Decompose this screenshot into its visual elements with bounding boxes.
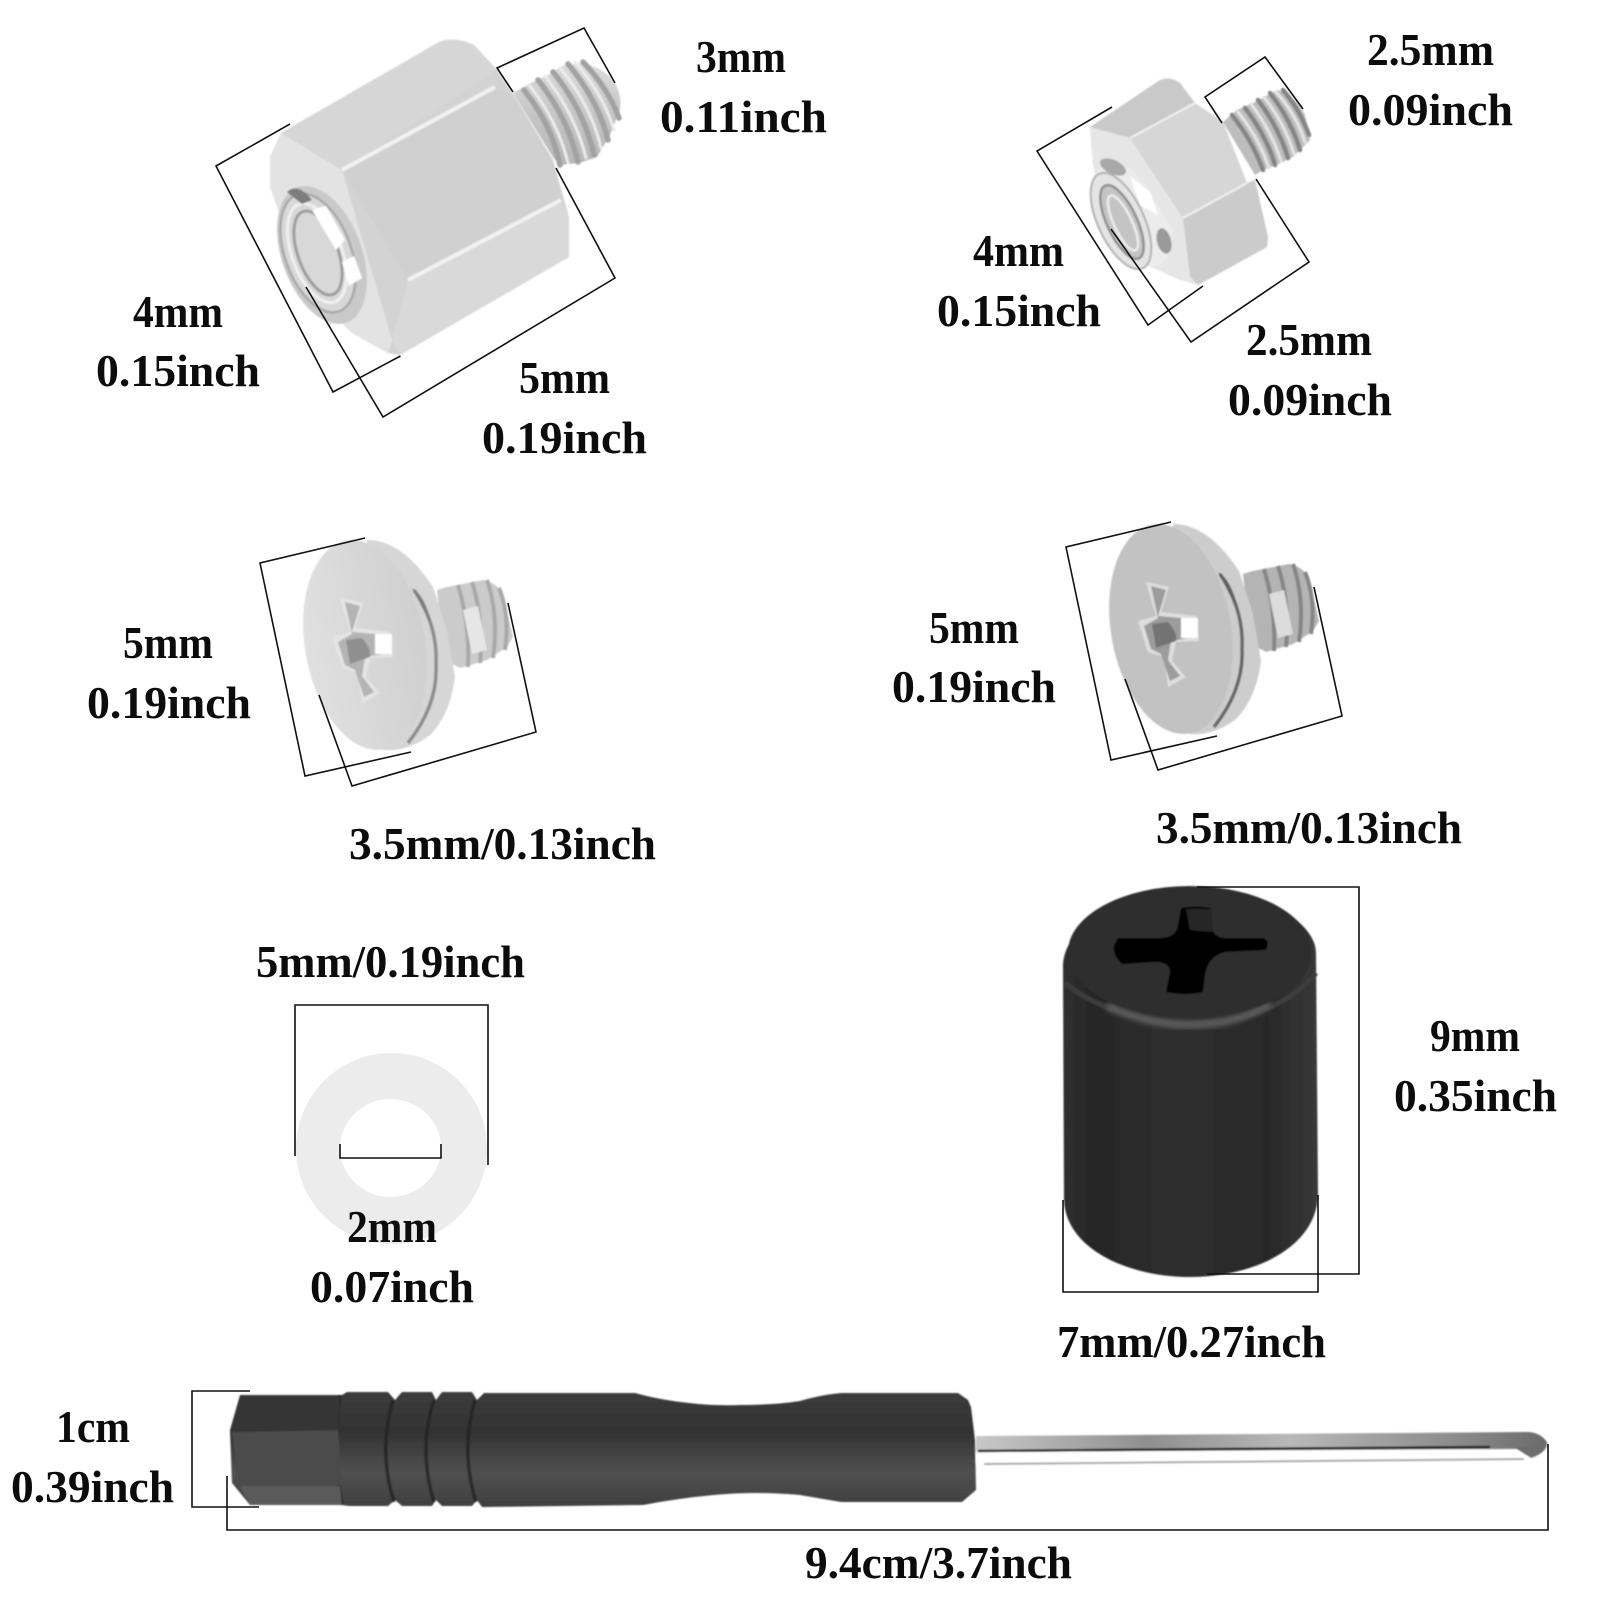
label: 5mm 0.19inch: 5mm (123, 618, 213, 668)
label: 5mm 0.19inch: 5mm (929, 603, 1019, 653)
label: 5mm 0.19inch (892, 603, 1056, 712)
bracket: 5mm outer (295, 1005, 488, 1165)
bracket: 4mm width (216, 124, 400, 392)
bracket: 5mm head (1066, 522, 1217, 760)
panel: screwdriver (11, 1391, 1548, 1588)
label: 9mm 0.35inch: 9mm (1430, 1011, 1520, 1061)
label: 9.4cm/3.7inch: 9.4cm/3.7inch (805, 1538, 1072, 1588)
label: 2.5mm 0.09inch bottom: 0.09inch (1228, 375, 1392, 425)
label: 5mm 0.19inch (482, 353, 647, 463)
label: 3mm 0.11inch: 3mm (696, 32, 786, 82)
label: 2mm 0.07inch: 2mm (347, 1202, 437, 1252)
label: 5mm 0.19inch: 0.19inch (87, 678, 251, 728)
bracket: 2.5mm thread (1205, 57, 1303, 123)
label: 2.5mm 0.09inch top: 0.09inch (1348, 85, 1513, 135)
label: 1cm 0.39inch (11, 1402, 174, 1512)
label: 2.5mm 0.09inch top (1348, 25, 1513, 135)
panel: washer (256, 937, 525, 1312)
panel: silver hex standoff, small (937, 25, 1513, 425)
label: 1cm 0.39inch: 1cm (56, 1402, 130, 1452)
label: 9mm 0.35inch: 0.35inch (1394, 1071, 1557, 1121)
label: 5mm 0.19inch (87, 618, 251, 728)
label: 2.5mm 0.09inch top: 2.5mm (1367, 25, 1494, 75)
label: 4mm 0.15inch (937, 226, 1101, 336)
panel: flat head screw, left (87, 530, 656, 869)
bracket: 9mm height (1197, 887, 1359, 1274)
label: 4mm 0.15inch: 0.15inch (96, 346, 260, 396)
label: 2mm 0.07inch (310, 1202, 474, 1312)
icon: black cylinder (1063, 886, 1318, 1277)
label: 9mm 0.35inch (1394, 1011, 1557, 1121)
icon: flat head screw (1094, 514, 1319, 744)
label: 4mm 0.15inch: 4mm (973, 226, 1064, 276)
bracket: 5mm head (260, 538, 411, 776)
label: 2.5mm 0.09inch bottom (1228, 315, 1392, 425)
panel: silver hex standoff, large (96, 28, 827, 463)
icon: hex standoff large (260, 40, 620, 355)
bracket: 2mm inner (340, 1144, 441, 1158)
label: 7mm/0.27inch: 7mm/0.27inch (1057, 1317, 1326, 1367)
bracket: 3mm thread (497, 28, 615, 92)
bracket: 5mm length (306, 168, 615, 417)
bracket: 3.5mm length (1125, 587, 1342, 770)
label: 5mm 0.19inch: 0.19inch (482, 413, 647, 463)
panel: black cylinder cap (1057, 886, 1557, 1367)
label: 3mm 0.11inch (660, 32, 827, 142)
bracket: 4mm width (1037, 107, 1203, 325)
bracket: 1cm diameter (192, 1391, 259, 1507)
label: 4mm 0.15inch (96, 287, 260, 396)
label: 4mm 0.15inch: 4mm (133, 287, 223, 337)
icon: flat head screw (288, 530, 513, 760)
label: 1cm 0.39inch: 0.39inch (11, 1462, 174, 1512)
bracket: 2.5mm length (1111, 179, 1309, 342)
label: 5mm/0.19inch: 5mm/0.19inch (256, 937, 525, 987)
panel: flat head screw, right (892, 514, 1462, 853)
icon: hex standoff small (1078, 79, 1310, 285)
label: 4mm 0.15inch: 0.15inch (937, 286, 1101, 336)
label: 3.5mm/0.13inch: 3.5mm/0.13inch (1156, 803, 1462, 853)
bracket: 9.4cm length (227, 1444, 1548, 1530)
label: 5mm 0.19inch: 5mm (519, 353, 610, 403)
bracket: 3.5mm length (319, 603, 536, 786)
label: 5mm 0.19inch: 0.19inch (892, 662, 1056, 712)
label: 2mm 0.07inch: 0.07inch (310, 1262, 474, 1312)
label: 3.5mm/0.13inch: 3.5mm/0.13inch (349, 819, 656, 869)
icon: washer (296, 1053, 487, 1244)
bracket: 7mm diameter (1063, 1195, 1318, 1292)
icon: screwdriver (230, 1392, 1547, 1507)
label: 3mm 0.11inch: 0.11inch (660, 92, 827, 142)
label: 2.5mm 0.09inch bottom: 2.5mm (1246, 315, 1372, 365)
